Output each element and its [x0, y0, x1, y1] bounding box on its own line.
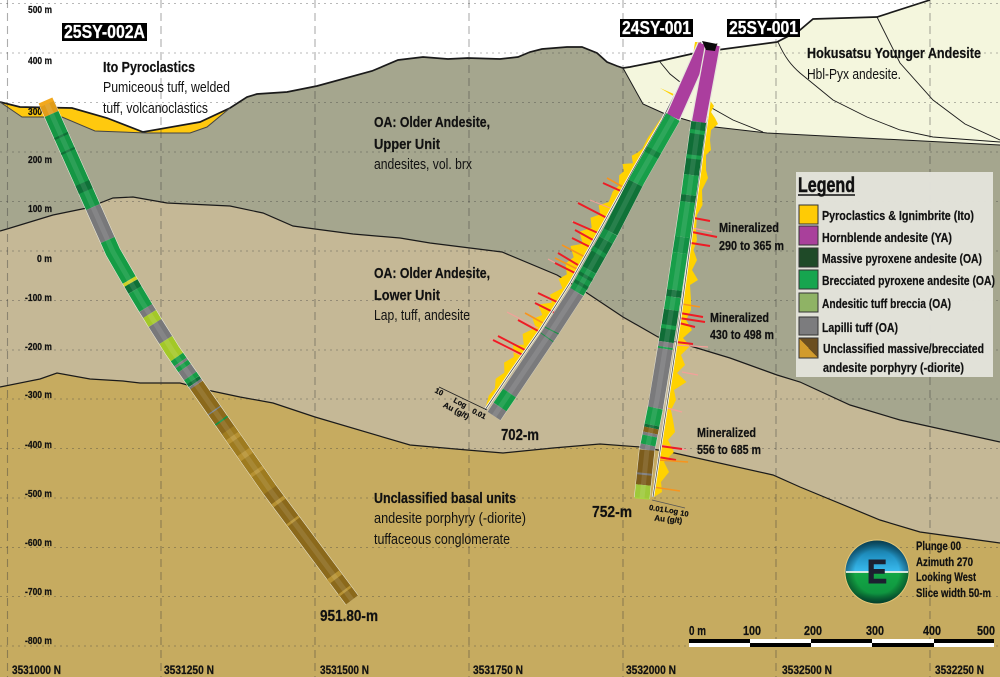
callout: mineralized 430 to 498 m: 430 to 498 m	[710, 328, 774, 342]
depth label: 752-m: 752-m	[592, 504, 632, 521]
legend item: unclassified andesite porphyry	[799, 338, 984, 375]
northing axis labels: 3532000 N	[626, 663, 676, 677]
legend item: pyroclastics	[799, 205, 974, 224]
callout: mineralized 430 to 498 m	[710, 311, 774, 342]
legend item: hornblende andesite: Hornblende andesite (YA)	[822, 231, 952, 245]
text: basal units	[374, 490, 526, 548]
icon: view orientation globe	[844, 540, 910, 604]
log scale: 24SY-001: 10	[433, 386, 445, 398]
scale bar: 300	[866, 624, 884, 638]
text: Older Andesite lower unit: Lap, tuff, andesite	[374, 307, 470, 324]
text: Older Andesite lower unit	[374, 265, 490, 324]
scale bar	[689, 624, 995, 647]
log scale: 24SY-001: Log	[452, 396, 469, 410]
elevation axis labels: 500 m	[28, 4, 52, 16]
text: Ito Pyroclastics: Pumiceous tuff, welded	[103, 79, 230, 96]
view parameters text	[916, 539, 991, 600]
northing axis labels: 3531000 N	[12, 663, 61, 677]
log scale: 25SY-001: Au (g/t)	[654, 514, 683, 525]
elevation axis labels: -700 m	[25, 586, 52, 598]
legend item: unclassified andesite porphyry: andesite porphyry (-diorite)	[823, 361, 964, 375]
log scale: 25SY-001: 10	[680, 508, 689, 519]
legend item: andesitic tuff breccia: Andesitic tuff breccia (OA)	[822, 297, 951, 311]
scale bar: 200	[804, 624, 822, 638]
assay histogram: 25SY-001	[653, 43, 718, 497]
hole label: 25SY-002A: 25SY-002A	[64, 22, 145, 42]
legend item: hornblende andesite	[799, 226, 952, 245]
text: Older Andesite upper unit: Upper Unit	[374, 136, 440, 153]
text: Older Andesite upper unit	[374, 114, 490, 173]
text: Older Andesite upper unit: andesites, vol. brx	[374, 156, 472, 173]
text: basal units: andesite porphyry (-diorite)	[374, 510, 526, 527]
icon: view orientation globe: E	[867, 553, 887, 590]
legend item: massive pyroxene andesite	[799, 248, 982, 267]
unit: Older Andesite lower	[0, 197, 1000, 560]
northing axis labels: 3531250 N	[164, 663, 214, 677]
scale bar: 400	[923, 624, 941, 638]
legend item: lapilli tuff: Lapilli tuff (OA)	[822, 321, 898, 335]
text: Hokusatsu Younger Andesite	[807, 45, 981, 83]
northing axis labels: 3532250 N	[935, 663, 984, 677]
drill hole: 25SY-001	[642, 45, 713, 499]
depth label: 702-m: 702-m	[501, 427, 539, 444]
elevation axis labels: -500 m	[25, 488, 52, 500]
legend item: lapilli tuff	[799, 317, 898, 335]
callout: mineralized 556 to 685 m	[697, 426, 761, 457]
elevation axis labels: 100 m	[28, 203, 52, 215]
callout: mineralized 556 to 685 m: Mineralized	[697, 426, 756, 440]
elevation axis labels: -400 m	[25, 439, 52, 451]
legend item: andesitic tuff breccia	[799, 293, 951, 312]
elevation axis labels: -800 m	[25, 635, 52, 647]
assay histogram: 24SY-001	[485, 42, 701, 410]
depth label: 951.80-m: 951.80-m	[320, 608, 378, 625]
callout: mineralized 290 to 365 m: Mineralized	[719, 221, 779, 235]
drill hole: 24SY-001	[494, 45, 705, 416]
unit: Hokusatsu Younger Andesite	[623, 0, 1000, 145]
text: Ito Pyroclastics	[103, 59, 230, 117]
legend item: brecciated pyroxene andesite	[799, 270, 995, 289]
northing axis labels	[12, 663, 984, 677]
callout: mineralized 556 to 685 m: 556 to 685 m	[697, 443, 761, 457]
log scale: 24SY-001: Au (g/t)	[442, 400, 471, 421]
view parameters text: Azimuth 270	[916, 555, 973, 569]
text: Older Andesite lower unit: Lower Unit	[374, 287, 440, 304]
log scale: 24SY-001	[433, 386, 488, 421]
callout: mineralized 290 to 365 m	[719, 221, 784, 253]
hole label: 25SY-001: 25SY-001	[729, 18, 798, 38]
legend heading: Legend	[798, 174, 855, 197]
drill hole: 25SY-002A	[46, 100, 352, 600]
log scale: 24SY-001: 0.01	[471, 406, 488, 421]
northing axis labels: 3531750 N	[473, 663, 523, 677]
text: basal units: Unclassified basal units	[374, 490, 516, 507]
panel: legend	[796, 172, 995, 377]
scale bar: 0 m	[689, 624, 706, 638]
elevation axis labels: 300 m	[28, 106, 52, 118]
unit: Ito pyroclastics	[0, 102, 230, 133]
text: Older Andesite upper unit: OA: Older Andesite,	[374, 114, 490, 131]
elevation axis labels	[25, 4, 52, 647]
view parameters text: Looking West	[916, 570, 976, 584]
text: Ito Pyroclastics: tuff, volcanoclastics	[103, 100, 208, 117]
unit: Older Andesite upper	[0, 47, 1000, 442]
elevation axis labels: 200 m	[28, 154, 52, 166]
unit: basal units	[0, 373, 1000, 677]
elevation axis labels: -100 m	[25, 292, 52, 304]
northing axis labels: 3531500 N	[320, 663, 369, 677]
text: Hokusatsu Younger Andesite: Hbl-Pyx andesite.	[807, 66, 901, 83]
log scale: 25SY-001: 0.01	[648, 503, 664, 514]
callout: mineralized 430 to 498 m: Mineralized	[710, 311, 769, 325]
log scale: 25SY-001	[648, 500, 689, 525]
text: Older Andesite lower unit: OA: Older Andesite,	[374, 265, 490, 282]
legend item: pyroclastics: Pyroclastics & Ignimbrite (Ito)	[822, 209, 974, 223]
drill collar	[702, 41, 717, 51]
scale bar: 100	[743, 624, 761, 638]
view parameters text: Plunge 00	[916, 539, 961, 553]
elevation axis labels: 400 m	[28, 55, 52, 67]
scale bar: 500	[977, 624, 995, 638]
elevation axis labels: -200 m	[25, 341, 52, 353]
northing axis labels: 3532500 N	[782, 663, 832, 677]
elevation axis labels: -600 m	[25, 537, 52, 549]
hole label: 24SY-001: 24SY-001	[622, 18, 691, 38]
log scale: 25SY-001: Log	[664, 505, 679, 516]
text: basal units: tuffaceous conglomerate	[374, 531, 510, 548]
elevation axis labels: -300 m	[25, 389, 52, 401]
elevation axis labels: 0 m	[37, 253, 52, 265]
text: Ito Pyroclastics: Ito Pyroclastics	[103, 59, 195, 76]
callout: mineralized 290 to 365 m: 290 to 365 m	[719, 239, 784, 253]
